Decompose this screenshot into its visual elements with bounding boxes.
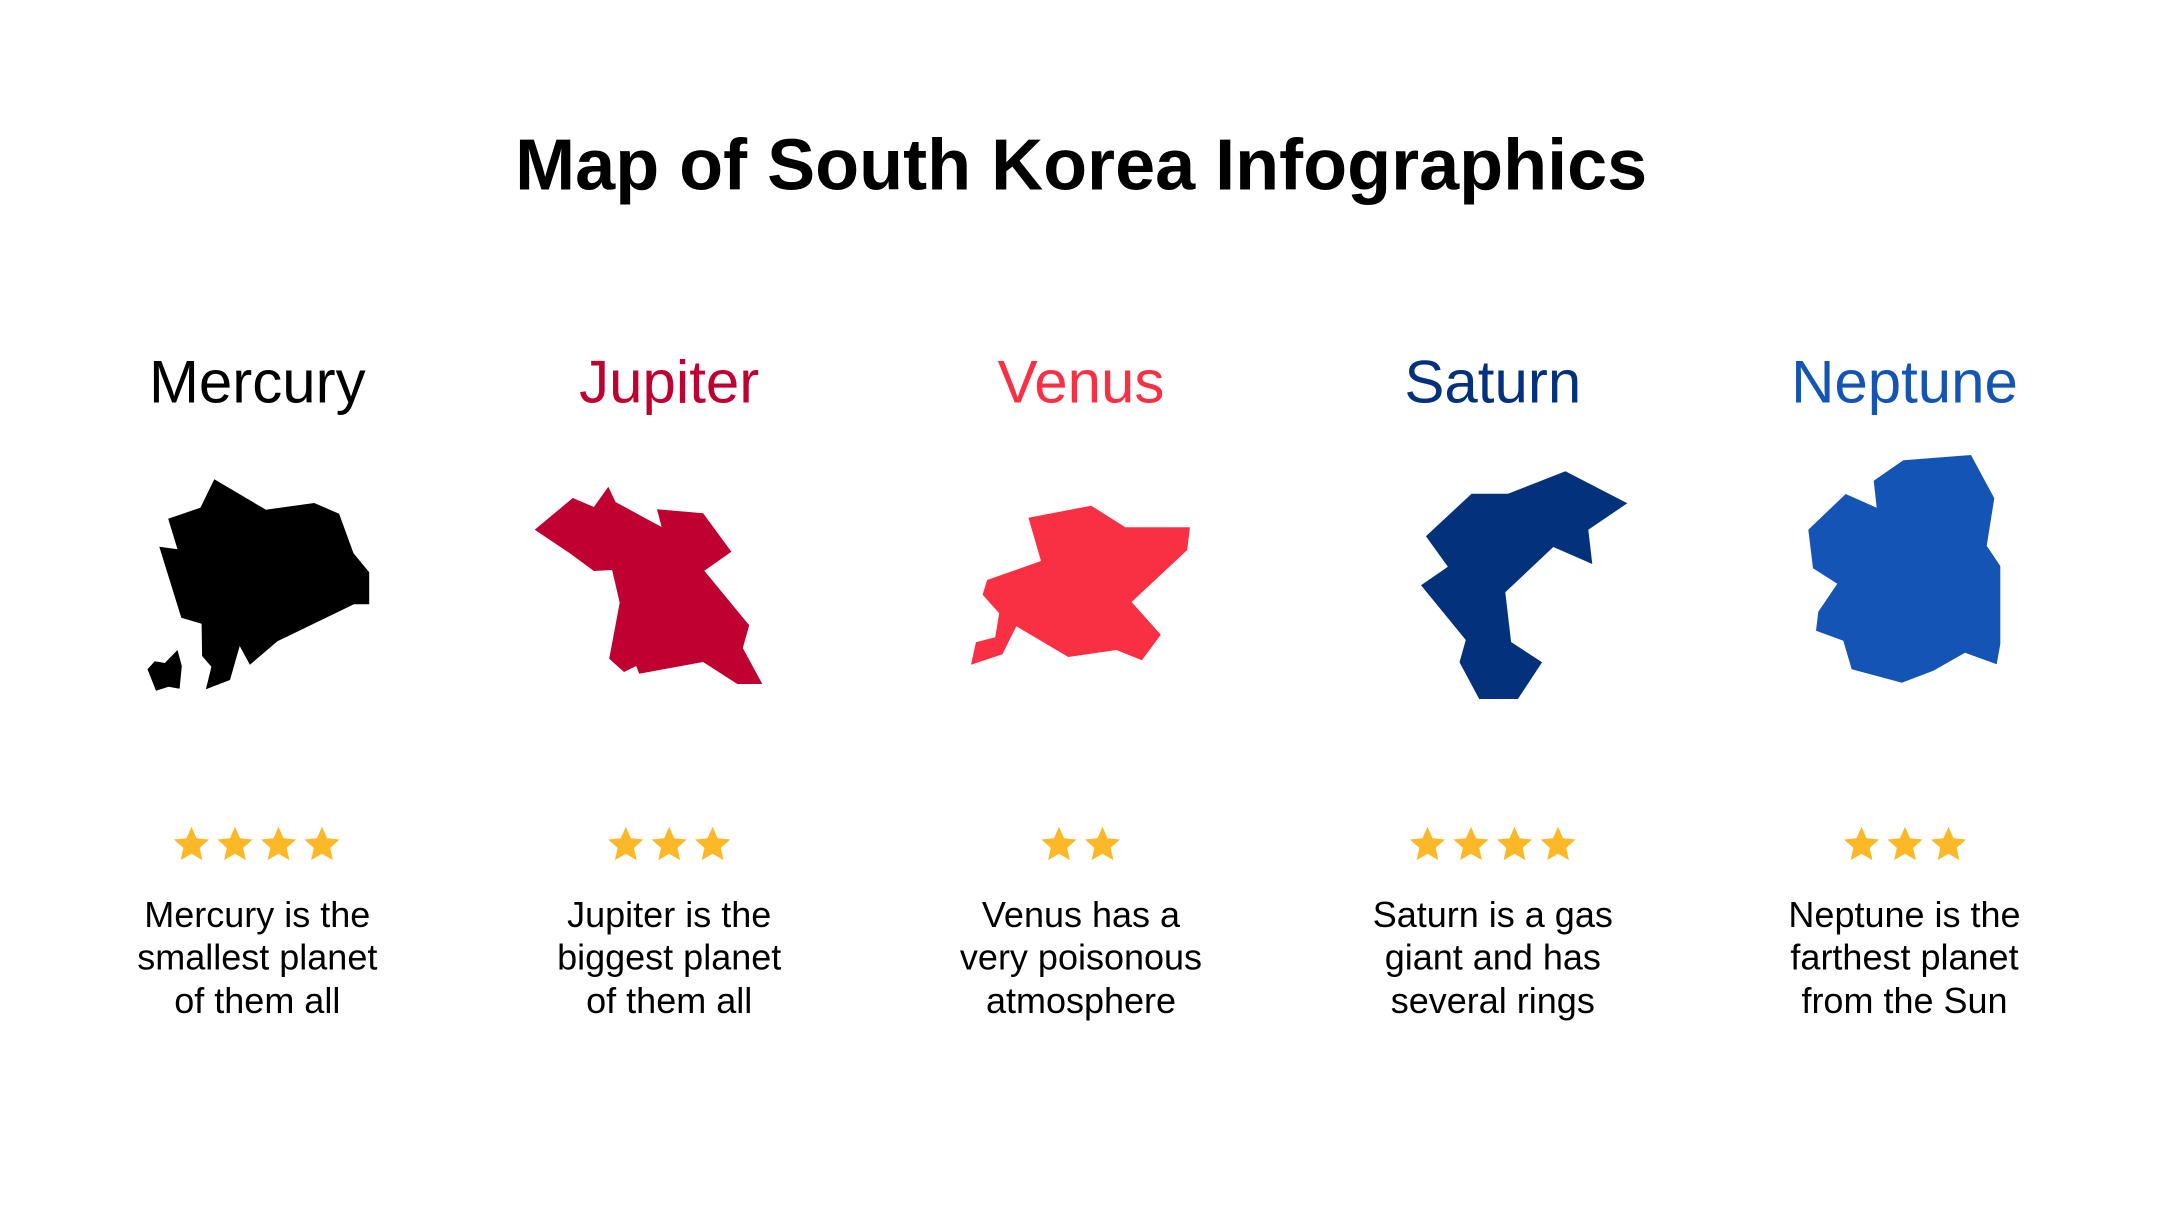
- description: Mercury: smallest planet: [137, 936, 377, 978]
- panel: Saturn: [1373, 349, 1627, 1021]
- map: Mercury: [148, 479, 369, 691]
- description: Jupiter: Jupiter is the: [567, 894, 771, 935]
- description: Venus: atmosphere: [986, 980, 1176, 1021]
- map: Venus: [971, 506, 1190, 665]
- description: Saturn: several rings: [1391, 980, 1595, 1021]
- description: Venus: Venus has a: [982, 894, 1181, 935]
- heading: Saturn: Saturn: [1404, 349, 1581, 416]
- description: Saturn: giant and has: [1385, 936, 1601, 978]
- description: Neptune: farthest planet: [1790, 936, 2019, 978]
- rating: 4 stars: [174, 827, 340, 860]
- map: Jupiter: [535, 487, 762, 684]
- description: Venus: very poisonous: [960, 936, 1202, 978]
- description: Neptune: from the Sun: [1801, 980, 2008, 1021]
- heading: Venus: Venus: [998, 349, 1164, 416]
- heading: Neptune: Neptune: [1791, 349, 2018, 416]
- rating: 2 stars: [1041, 827, 1120, 860]
- description: Mercury: Mercury is the: [144, 894, 370, 935]
- description: Saturn: [1373, 894, 1613, 1021]
- description: Mercury: [137, 894, 377, 1021]
- panel: Neptune: [1788, 349, 2021, 1021]
- description: Jupiter: of them all: [586, 980, 752, 1021]
- heading: Mercury: Mercury: [149, 349, 366, 416]
- description: Neptune: Neptune is the: [1788, 894, 2021, 935]
- panel: Mercury: [137, 349, 377, 1021]
- description: Mercury: of them all: [174, 980, 340, 1021]
- description: Venus: [960, 894, 1202, 1021]
- rating: 4 stars: [1410, 827, 1576, 860]
- title: Map of South Korea Infographics: [515, 126, 1647, 206]
- map: Saturn: [1421, 471, 1627, 699]
- heading: Jupiter: Jupiter: [579, 349, 759, 416]
- map: Neptune: [1808, 455, 2000, 683]
- rating: 3 stars: [1844, 827, 1966, 860]
- description: Jupiter: [557, 894, 781, 1021]
- panel: Venus: [960, 349, 1202, 1021]
- description: Saturn: Saturn is a gas: [1373, 894, 1613, 935]
- description: Neptune: [1788, 894, 2021, 1021]
- panel: Jupiter: [535, 349, 781, 1021]
- rating: 3 stars: [608, 827, 730, 860]
- description: Jupiter: biggest planet: [557, 936, 781, 978]
